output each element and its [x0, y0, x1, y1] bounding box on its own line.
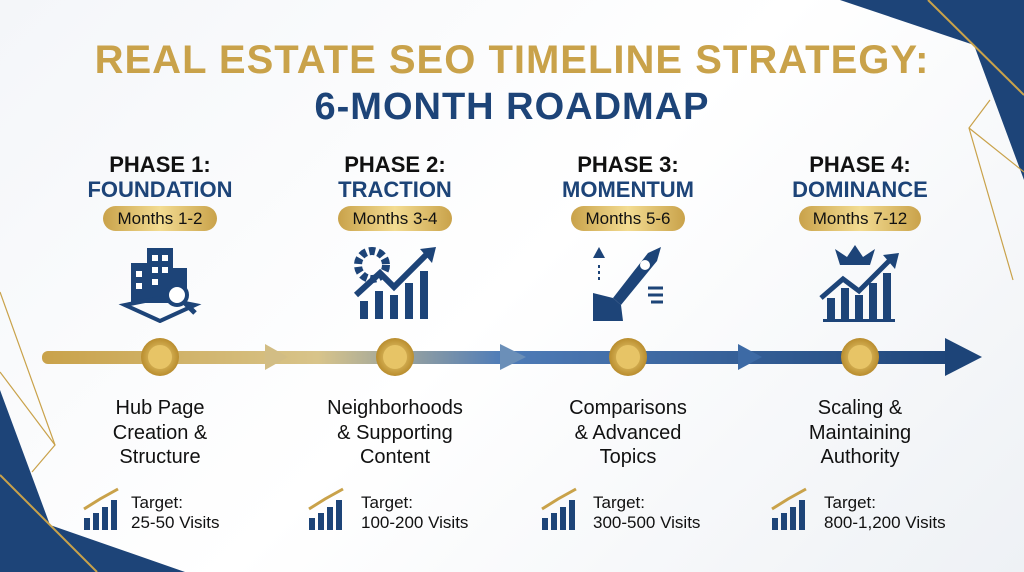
phase 1: FOUNDATION	[87, 177, 233, 202]
target 2: Target:	[361, 493, 413, 512]
descriptions: Structure	[119, 446, 201, 468]
phase 3: Months 5-6	[585, 209, 671, 228]
target 4: 800-1,200 Visits	[824, 513, 946, 532]
phase 1: PHASE 1:	[109, 152, 211, 177]
target 3	[593, 493, 700, 532]
phase 2: TRACTION	[338, 177, 452, 202]
phase 3: PHASE 3:	[577, 152, 679, 177]
timeline arrow	[42, 338, 982, 376]
title: REAL ESTATE SEO TIMELINE STRATEGY:	[95, 38, 929, 82]
icon: buildings with magnifier	[118, 248, 202, 323]
target 2	[361, 493, 468, 532]
text: Comparisons	[569, 397, 687, 419]
target 3: 300-500 Visits	[593, 513, 700, 532]
phase 3	[562, 152, 694, 321]
subtitle: 6-MONTH ROADMAP	[314, 86, 709, 128]
descriptions: Creation &	[113, 422, 207, 444]
text: Maintaining	[809, 422, 911, 444]
target 1: 25-50 Visits	[131, 513, 220, 532]
phase 2	[338, 152, 452, 319]
icon: crown with chart	[819, 245, 899, 322]
text: Scaling &	[818, 397, 902, 419]
descriptions	[113, 397, 207, 468]
text: Content	[360, 446, 430, 468]
descriptions: Hub Page	[116, 397, 204, 419]
phase 2: Months 3-4	[352, 209, 438, 228]
phase 4	[792, 152, 928, 322]
target 1: Target:	[131, 493, 183, 512]
text: & Advanced	[575, 422, 681, 444]
targets	[83, 488, 807, 530]
phase 4: PHASE 4:	[809, 152, 911, 177]
text: Neighborhoods	[327, 397, 463, 419]
text: & Supporting	[337, 422, 453, 444]
target 1	[131, 493, 220, 532]
icon: gear with growth chart	[354, 247, 436, 319]
target 3: Target:	[593, 493, 645, 512]
phase 3: MOMENTUM	[562, 177, 694, 202]
phase 1	[87, 152, 233, 323]
target 4	[824, 493, 946, 532]
text: Authority	[821, 446, 899, 468]
text: Topics	[600, 446, 656, 468]
phase 4: Months 7-12	[813, 209, 907, 228]
target 2: 100-200 Visits	[361, 513, 468, 532]
phase 2: PHASE 2:	[344, 152, 446, 177]
icon: rocket	[593, 247, 663, 321]
target 4: Target:	[824, 493, 876, 512]
phase 1: Months 1-2	[117, 209, 203, 228]
phase 4: DOMINANCE	[792, 177, 928, 202]
